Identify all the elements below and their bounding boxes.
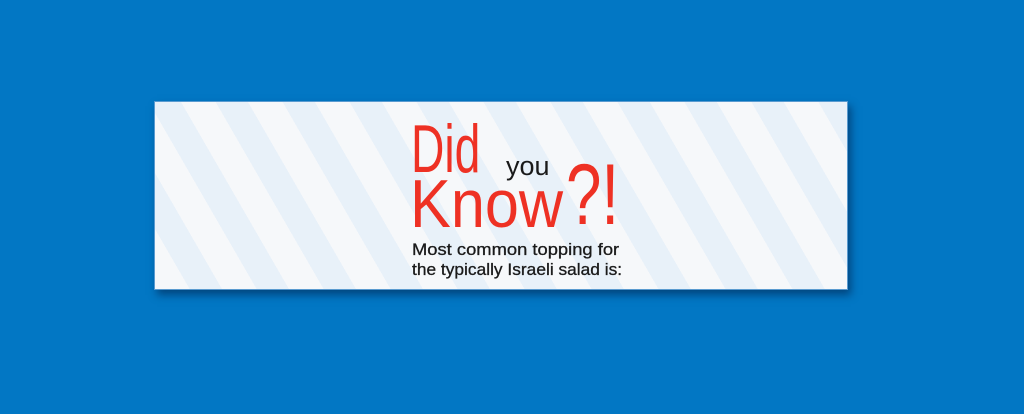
heading: you: you [506,151,550,181]
panel: did you know banner [154,101,848,290]
text block: subtitle [412,240,622,279]
heading: Did: Did [411,111,480,187]
heading: ?!: ?! [566,147,619,243]
heading: Know: Know [410,166,563,242]
text block: subtitle: Most common topping for [412,240,619,259]
text block: subtitle: the typically Israeli salad is: [412,260,622,279]
